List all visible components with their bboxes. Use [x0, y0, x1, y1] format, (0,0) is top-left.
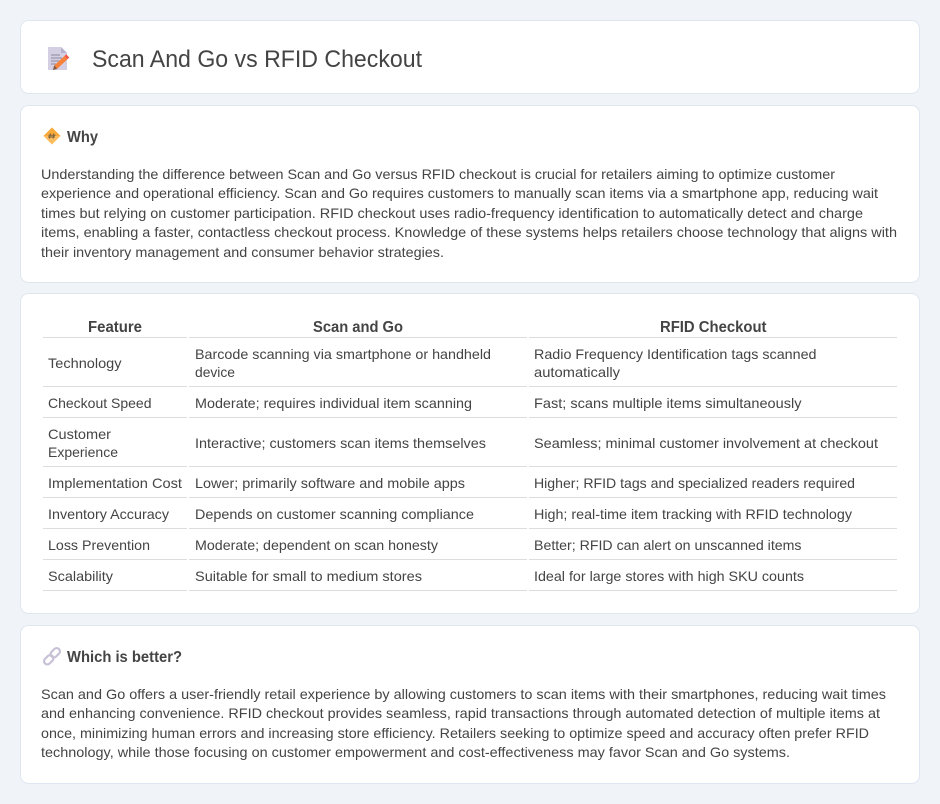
icon: document with pencil [48, 47, 69, 70]
table row: customer experience: Seamless; minimal customer involvement at checkout [534, 435, 878, 451]
table row: loss prevention: Moderate; dependent on scan honesty [195, 537, 438, 553]
heading: which is better: Which is better? [67, 649, 182, 666]
icon: diamond sign [44, 128, 60, 144]
panel: why [20, 106, 920, 282]
table row: technology [43, 346, 897, 387]
table row: technology: Barcode scanning via smartphone or handheld [195, 346, 491, 362]
text block: why explanation: their inventory management and consumer behavior strategies. [41, 244, 444, 260]
table row: inventory accuracy [43, 506, 897, 529]
table row: implementation cost: Higher; RFID tags and specialized readers required [534, 475, 855, 491]
table header row: Scan and Go [313, 319, 403, 336]
table row: technology: Radio Frequency Identification tags scanned [534, 346, 816, 362]
table row: customer experience: Customer [48, 426, 111, 442]
table row: technology: device [195, 364, 235, 380]
table row: inventory accuracy: Depends on customer scanning compliance [195, 506, 474, 522]
panel: which is better [20, 626, 920, 784]
heading: why: Why [67, 129, 98, 146]
table header row [43, 319, 897, 338]
icon: chain link [43, 647, 61, 666]
text block: which is better explanation: and enhancing convenience. RFID checkout provides seamless, rapid transactions through automated detection of multiple items at [41, 705, 880, 721]
table row: customer experience: Experience [48, 444, 118, 460]
text block: which is better explanation: Scan and Go offers a user-friendly retail experience by allowing customers to scan items with their smartphones, reducing wait times [41, 686, 886, 702]
table row: checkout speed: Checkout Speed [48, 395, 152, 411]
text block: why explanation: items, enabling a faster, contactless checkout process. Knowledge of these systems helps retailers choose technology that aligns with [41, 224, 897, 240]
table row: checkout speed: Moderate; requires individual item scanning [195, 395, 472, 411]
table row: scalability: Suitable for small to medium stores [195, 568, 422, 584]
panel: comparison table [20, 294, 920, 614]
table row: customer experience [43, 426, 897, 467]
text block: why explanation [41, 166, 897, 260]
text block: why explanation: experience and operational efficiency. Scan and Go requires customers to manually scan items via a smartphone app, reducing wait [41, 185, 878, 201]
table row: loss prevention: Better; RFID can alert on unscanned items [534, 537, 802, 553]
table row: customer experience: Interactive; customers scan items themselves [195, 435, 486, 451]
table row: implementation cost: Implementation Cost [48, 475, 182, 491]
table row: checkout speed: Fast; scans multiple items simultaneously [534, 395, 802, 411]
table header row: RFID Checkout [660, 319, 767, 336]
table row: scalability: Ideal for large stores with high SKU counts [534, 568, 804, 584]
table row: scalability: Scalability [48, 568, 113, 584]
table row: technology: Technology [48, 355, 121, 371]
panel: title header [20, 20, 920, 94]
table row: scalability [43, 568, 897, 591]
text block: why explanation: times but relying on customer participation. RFID checkout uses radio-frequency identification to automatically detect and charge [41, 205, 863, 221]
text block: which is better explanation [41, 686, 886, 760]
table row: loss prevention: Loss Prevention [48, 537, 150, 553]
table row: implementation cost [43, 475, 897, 498]
text block: why explanation: Understanding the difference between Scan and Go versus RFID checkout is crucial for retailers aiming to optimize customer [41, 166, 835, 182]
table row: implementation cost: Lower; primarily software and mobile apps [195, 475, 465, 491]
table row: loss prevention [43, 537, 897, 560]
text block: which is better explanation: once, minimizing human errors and increasing store efficiency. Retailers seeking to optimize speed and accuracy often prefer RFID [41, 725, 869, 741]
table header row: Feature [88, 319, 142, 336]
table row: inventory accuracy: High; real-time item tracking with RFID technology [534, 506, 852, 522]
text block: which is better explanation: technology, while those focusing on customer empowerment and cost-effectiveness may favor Scan and Go systems. [41, 744, 790, 760]
title: Scan And Go vs RFID Checkout [92, 46, 422, 73]
table row: technology: automatically [534, 364, 620, 380]
table row: inventory accuracy: Inventory Accuracy [48, 506, 169, 522]
table row: checkout speed [43, 395, 897, 418]
